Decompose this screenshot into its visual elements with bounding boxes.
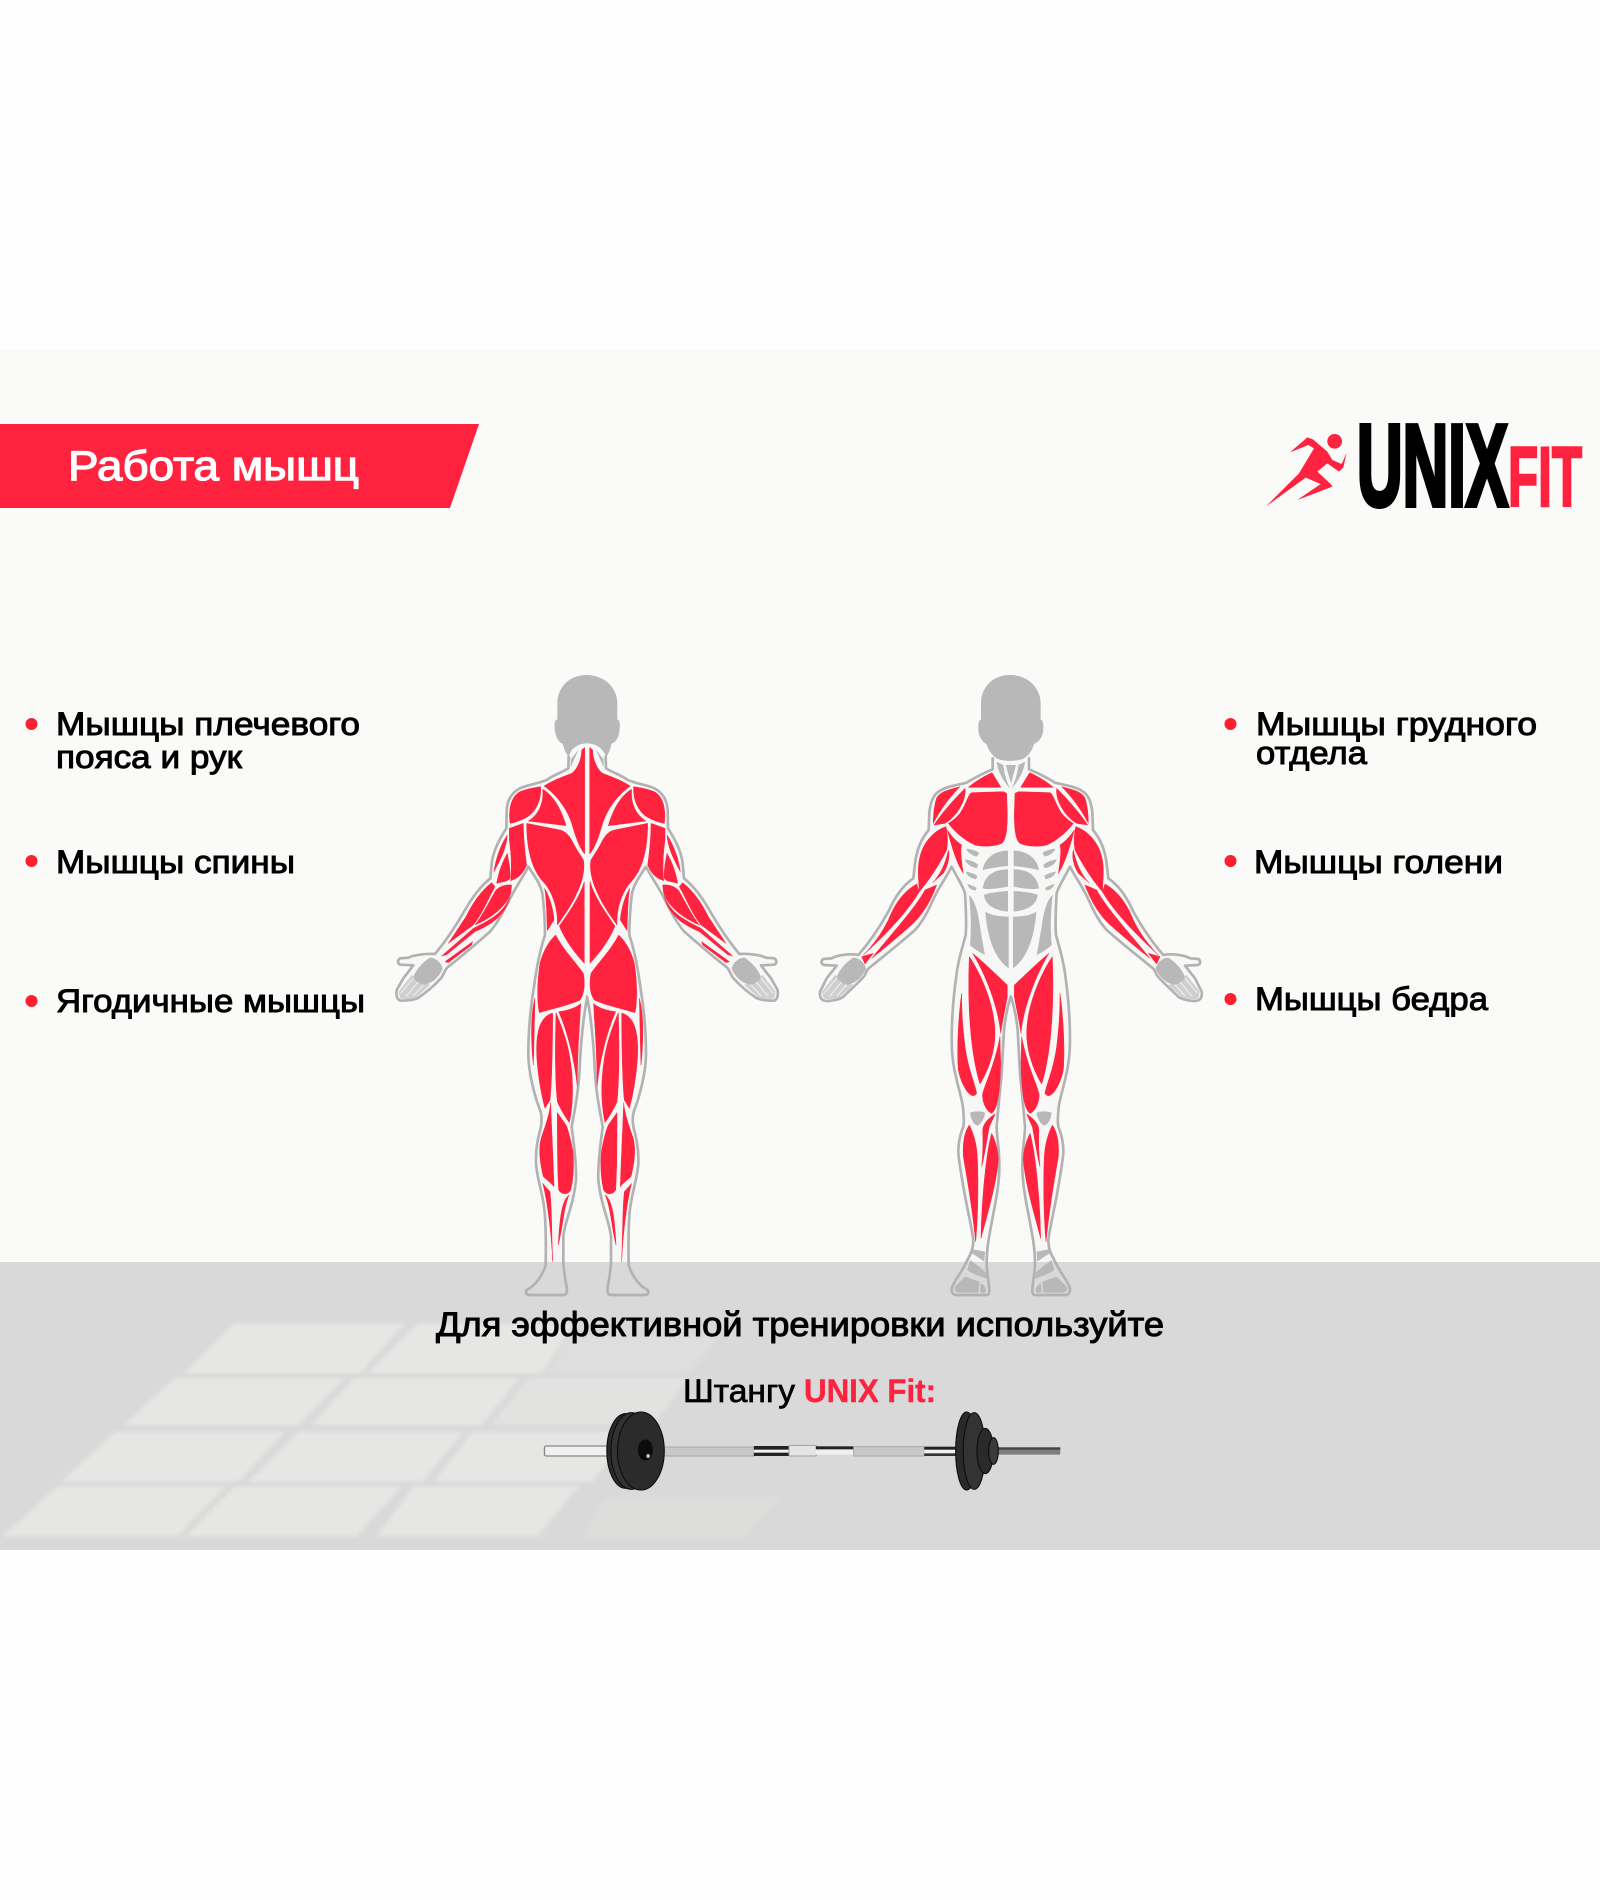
bullet: thigh muscles bbox=[1224, 993, 1236, 1005]
text: chest muscles: отдела bbox=[1256, 735, 1367, 771]
forearm outer bbox=[863, 884, 919, 955]
brachialis bbox=[933, 850, 949, 883]
text: glutes: Ягодичные мышцы bbox=[56, 983, 365, 1019]
deltoid inner bbox=[934, 788, 965, 825]
gluteus bbox=[538, 935, 584, 1013]
forearm outer bbox=[448, 883, 495, 943]
icon: running figure bbox=[1266, 434, 1347, 507]
text: calf muscles: Мышцы голени bbox=[1254, 844, 1503, 880]
logo: UNIX FIT bbox=[1266, 400, 1582, 530]
text: thigh muscles: Мышцы бедра bbox=[1255, 981, 1488, 1017]
lower abs bbox=[984, 891, 1008, 912]
floor window light pattern bbox=[2, 1323, 780, 1537]
text: shoulder and arm muscles: пояса и рук bbox=[56, 739, 243, 775]
product line: Штангу bbox=[683, 1373, 795, 1409]
bullet: glutes bbox=[26, 995, 38, 1007]
front left half bbox=[820, 757, 1011, 1295]
rectus femoris bbox=[969, 957, 995, 1084]
adductor bbox=[559, 1003, 581, 1087]
biceps bbox=[918, 827, 948, 892]
hand finger lines bbox=[401, 978, 423, 997]
front head bbox=[978, 675, 1043, 761]
forearm middle bbox=[475, 885, 512, 925]
panel: light background bbox=[0, 350, 1600, 1262]
back left half bbox=[396, 747, 588, 1295]
bullet: back muscles bbox=[26, 855, 38, 867]
wrist strip bbox=[445, 942, 473, 963]
hand fingers bbox=[399, 975, 430, 999]
vastus medialis bbox=[983, 1037, 1001, 1113]
upper abs bbox=[983, 851, 1008, 870]
oblique bbox=[969, 895, 985, 955]
infraspinatus bbox=[528, 789, 566, 826]
right list: muscle groups bbox=[1224, 706, 1537, 1017]
left plates bbox=[607, 1412, 664, 1490]
product line bbox=[683, 1373, 936, 1409]
forearm strip bbox=[442, 897, 510, 956]
figure: back view bbox=[396, 675, 778, 1295]
outer thigh sliver bbox=[532, 998, 535, 1065]
finger lines bbox=[824, 978, 847, 997]
deltoid outer bbox=[933, 787, 960, 823]
outer shin bbox=[543, 1183, 553, 1262]
text: chest muscles bbox=[1256, 706, 1537, 771]
text: shoulder and arm muscles bbox=[56, 706, 360, 775]
right plates bbox=[956, 1412, 998, 1490]
front right half (mirrored) bbox=[1010, 757, 1202, 1295]
bullet: chest muscles bbox=[1224, 718, 1236, 730]
forearm inner bbox=[872, 885, 937, 958]
call to action heading: Для эффективной тренировки используйте bbox=[436, 1306, 1164, 1344]
barbell bbox=[544, 1412, 1060, 1490]
foot bones bbox=[954, 1249, 987, 1293]
calf inner bbox=[981, 1133, 998, 1238]
upper arm inner bbox=[497, 853, 510, 883]
outer calf bbox=[540, 1103, 554, 1187]
neck sliver bbox=[997, 762, 1010, 788]
back leg muscles bbox=[532, 998, 581, 1262]
biceps femoris bbox=[537, 1013, 553, 1108]
neck grey sliver bbox=[571, 750, 578, 767]
semitendinosus bbox=[555, 1013, 573, 1123]
front leg bbox=[954, 953, 1007, 1293]
oblique bbox=[545, 888, 554, 931]
trapezius bbox=[544, 747, 585, 854]
back head bbox=[555, 675, 620, 757]
upper arm outer bbox=[494, 835, 507, 872]
latissimus bbox=[527, 823, 584, 925]
back right half (mirrored) bbox=[587, 747, 778, 1295]
deltoid bbox=[510, 787, 541, 823]
text: chest muscles: Мышцы грудного bbox=[1256, 706, 1537, 742]
sartorius bbox=[973, 953, 1007, 1033]
lower abdomen bbox=[985, 912, 1009, 968]
hand palm bbox=[414, 958, 443, 984]
knee bbox=[970, 1111, 985, 1126]
triceps bbox=[509, 823, 527, 881]
text: back muscles: Мышцы спины bbox=[56, 844, 295, 880]
neck centre bbox=[1006, 765, 1016, 783]
panel: grey floor band bbox=[0, 1262, 1600, 1550]
bullet: calf muscles bbox=[1224, 855, 1236, 867]
inner calf bbox=[557, 1113, 573, 1194]
palm bbox=[837, 958, 866, 984]
bullet: shoulder and arm muscles bbox=[26, 718, 38, 730]
banner: section title bbox=[0, 424, 479, 508]
hand fingers bbox=[822, 975, 853, 999]
middle abs bbox=[983, 869, 1008, 889]
calf outer bbox=[963, 1125, 978, 1242]
side chest bbox=[947, 830, 963, 873]
text: shoulder and arm muscles: Мышцы плечевого bbox=[56, 706, 360, 742]
upper trapezius bbox=[968, 773, 1001, 787]
ribs bbox=[965, 849, 979, 891]
figure: front view bbox=[820, 675, 1202, 1295]
vastus lateralis bbox=[958, 993, 977, 1096]
pectoral bbox=[948, 792, 1007, 846]
tibialis small bbox=[982, 1114, 995, 1167]
left list: muscle groups bbox=[26, 706, 365, 1019]
bar sections bbox=[544, 1445, 1060, 1456]
lower back bbox=[559, 882, 584, 963]
inner shin bbox=[558, 1195, 569, 1245]
product line: UNIX Fit: bbox=[804, 1373, 936, 1409]
wrist bbox=[862, 953, 873, 964]
banner: section title: Работа мышц bbox=[68, 442, 359, 489]
